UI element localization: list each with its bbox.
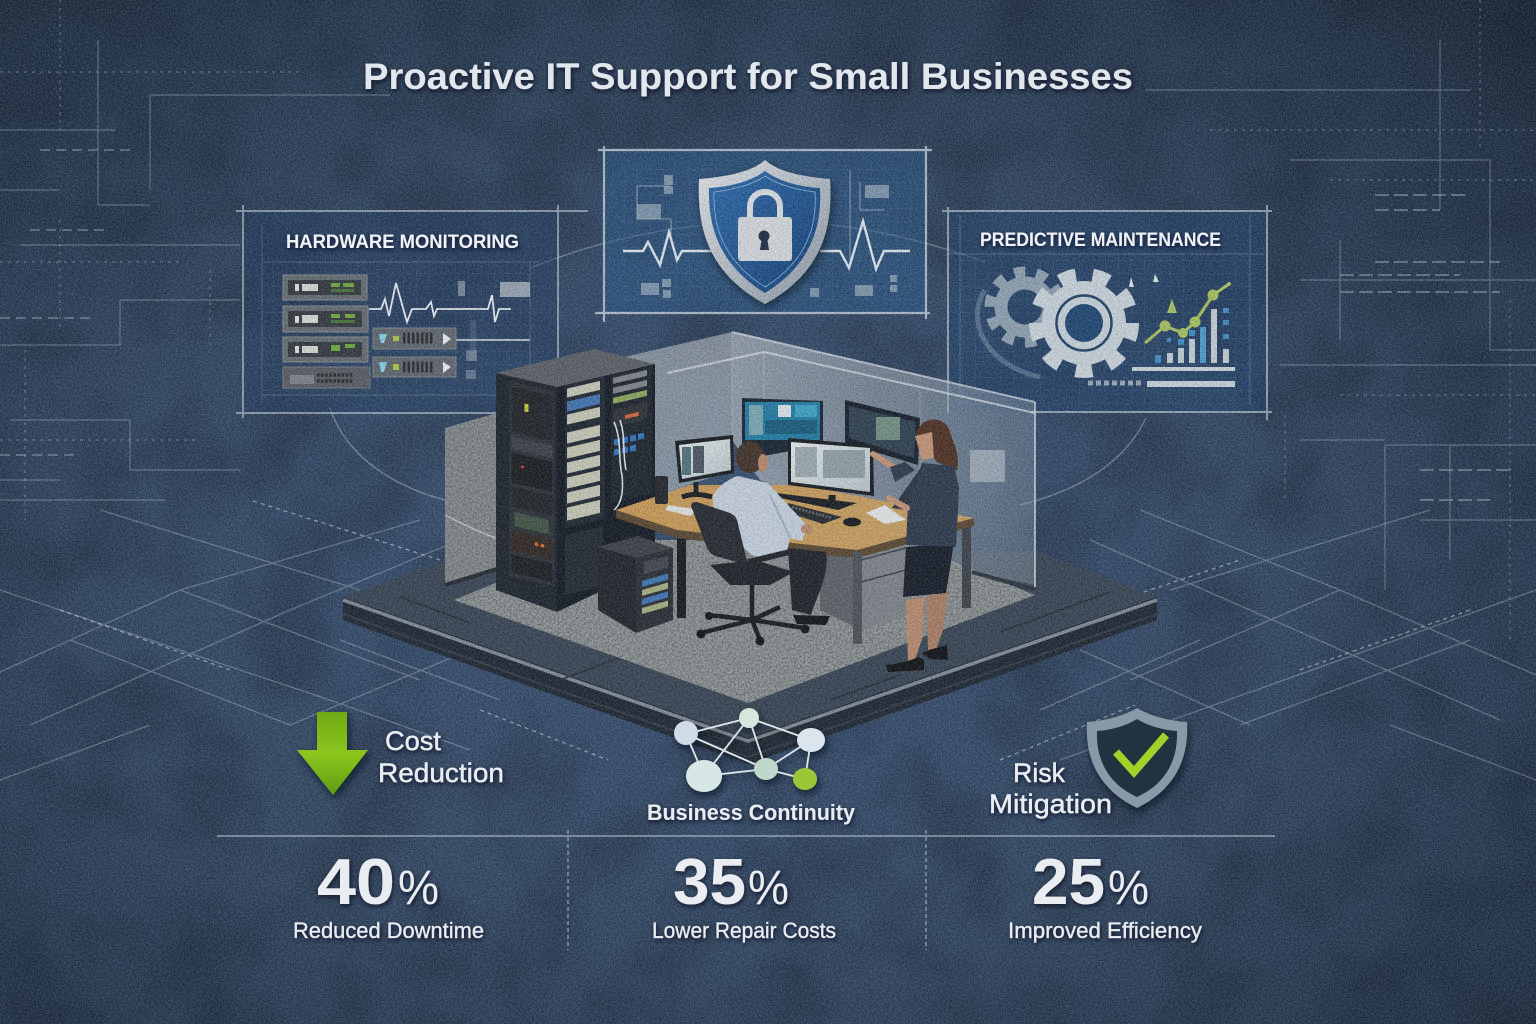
stat: reduced downtime: 40 [317, 845, 395, 918]
stat: lower repair costs: 35 [673, 845, 746, 918]
stat: improved efficiency: % [1108, 862, 1149, 915]
carpet [454, 540, 1035, 703]
office chair [691, 502, 810, 646]
stat: improved efficiency: Improved Efficiency [1008, 918, 1202, 943]
icon: cost reduction arrow [297, 712, 368, 795]
chart: heartbeat monitor [369, 281, 530, 379]
panel: security shield [595, 146, 932, 322]
background isometric floor lines [0, 500, 1536, 780]
stat: reduced downtime: % [398, 862, 439, 915]
panel: hardware monitoring [236, 205, 588, 420]
background circuit lines: top right [1145, 0, 1536, 640]
label: risk mitigation: Risk [1013, 758, 1065, 788]
stat: reduced downtime [293, 845, 484, 943]
monitor wall display dark [845, 400, 920, 465]
stat: improved efficiency [1008, 845, 1202, 943]
monitor wall display blue [742, 398, 823, 460]
icon: large gear [1036, 275, 1132, 371]
granite side wall [445, 413, 497, 585]
label: risk mitigation [989, 758, 1112, 819]
label: risk mitigation: Mitigation [989, 789, 1112, 819]
platform base [343, 552, 1157, 764]
label: cost reduction: Reduction [378, 758, 504, 788]
icon: server stack [283, 275, 370, 388]
background circuit lines: top left [0, 0, 390, 520]
stat: lower repair costs: Lower Repair Costs [652, 918, 836, 943]
rack right face equipment [565, 365, 652, 595]
glass walls [590, 332, 1035, 590]
server rack [496, 349, 655, 612]
person: seated technician [713, 441, 830, 625]
monitor small left [655, 435, 734, 504]
stat: lower repair costs [652, 845, 836, 943]
icon: network nodes [674, 708, 825, 792]
chart: shield heartbeat [623, 170, 910, 269]
heading: predictive maintenance: PREDICTIVE MAINTENANCE [980, 230, 1221, 251]
label: business continuity: Business Continuity [647, 800, 856, 825]
desk [616, 485, 974, 644]
stat: reduced downtime: Reduced Downtime [293, 918, 484, 943]
icon: network switches [373, 328, 456, 377]
icon: shield with padlock [699, 160, 831, 304]
monitor large centre [776, 438, 874, 510]
icon: shield with check [1087, 708, 1187, 808]
title: Proactive IT Support for Small Businesses [363, 56, 1133, 97]
chart: predictive bars and trend [1088, 274, 1235, 387]
decorative panel blocks [637, 175, 897, 298]
icon: small gear [977, 272, 1060, 377]
label: cost reduction: Cost [385, 726, 441, 756]
small floor server [598, 536, 673, 633]
stat: lower repair costs: % [748, 862, 789, 915]
panel: predictive maintenance [942, 205, 1272, 420]
label: cost reduction [378, 726, 504, 788]
rack left face equipment [510, 381, 554, 586]
heading: hardware monitoring: HARDWARE MONITORING [286, 231, 519, 253]
person: standing manager [873, 419, 959, 672]
background arcs [330, 222, 1146, 505]
keyboard and mouse [786, 503, 861, 526]
stats dividers [217, 830, 1275, 950]
stat: improved efficiency: 25 [1032, 845, 1105, 918]
